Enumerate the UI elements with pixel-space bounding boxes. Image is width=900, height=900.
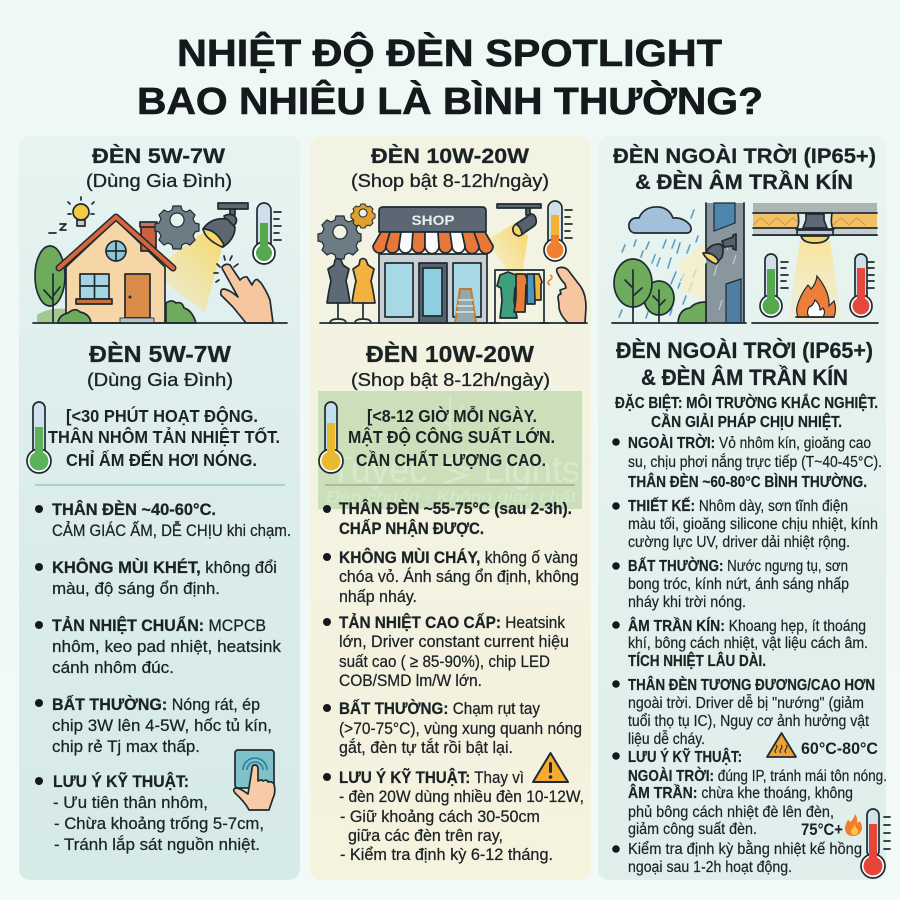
title: BAO NHIÊU LÀ BÌNH THƯỜNG? — [137, 79, 763, 123]
heading: 5W-7W lower — [87, 340, 233, 390]
bullet: technical notes: giảm công suất đèn. — [628, 821, 757, 838]
bullet: infrared check: Kiểm tra định kỳ bằng nhiệt kế hồng — [628, 841, 862, 858]
heading: 10W-20W lower: (Shop bật 8-12h/ngày) — [351, 370, 550, 390]
panel: 5W-7W household lamps — [19, 136, 300, 880]
heading: outdoor top: & ĐÈN ÂM TRẦN KÍN — [635, 170, 853, 194]
bullet: abnormal signs: chip rẻ Tj max thấp. — [52, 737, 200, 756]
bullet: body temperature: tuổi thọ tụ IC), Nguy cơ ảnh hưởng vật — [628, 713, 870, 730]
bullet: no burnt smell — [35, 558, 277, 598]
bullet: technical notes: - Giữ khoảng cách 30-50cm — [340, 808, 540, 826]
summary text: under 30 minutes: CHỈ ẤM ĐẾN HƠI NÓNG. — [66, 449, 257, 470]
watermark — [318, 391, 582, 509]
bullet: outdoor: THÂN ĐÈN ~60-80°C BÌNH THƯỜNG. — [628, 473, 867, 491]
bullet: recessed ceiling: khí, bông cách nhiệt, vật liệu cách âm. — [628, 635, 868, 652]
bullet: recessed ceiling: TÍCH NHIỆT LÂU DÀI. — [628, 652, 766, 670]
bullet: infrared check — [612, 841, 862, 876]
summary text: under 30 minutes: [<30 PHÚT HOẠT ĐỘNG. — [66, 405, 258, 426]
panel: outdoor IP65 and sealed recessed lamps — [598, 136, 890, 880]
summary text: 8-12 hours — [348, 405, 555, 470]
summary text: under 30 minutes: THÂN NHÔM TẢN NHIỆT TỐT. — [48, 426, 280, 447]
summary text: 8-12 hours: [<8-12 GIỜ MỖI NGÀY. — [367, 405, 537, 426]
bullet: technical notes: LƯU Ý KỸ THUẬT: — [53, 771, 189, 791]
heading: 10W-20W lower: ĐÈN 10W-20W — [366, 340, 534, 367]
bullet: design: màu tối, gioăng silicone chịu nhiệt, kính — [628, 516, 878, 533]
illustration: shop with spotlight: SHOP — [412, 212, 454, 228]
bullet: abnormal signs — [612, 557, 849, 611]
heading: outdoor top — [613, 144, 876, 194]
bullet: outdoor: NGOÀI TRỜI: Vỏ nhôm kín, gioăng cao — [628, 434, 871, 452]
bullet: body temperature: CHẤP NHẬN ĐƯỢC. — [339, 519, 484, 538]
bullet: premium cooling: COB/SMD lm/W lớn. — [339, 672, 482, 690]
heading: 5W-7W top — [86, 145, 232, 191]
bullet: no burning smell: nhấp nháy. — [339, 588, 417, 606]
heading: 10W-20W top: ĐÈN 10W-20W — [371, 145, 529, 168]
special note text: CẦN GIẢI PHÁP CHỊU NHIỆT. — [651, 413, 842, 431]
bullet: abnormal signs: BẤT THƯỜNG: Nước ngưng tụ, sơn — [628, 557, 848, 575]
bullet: design — [612, 498, 878, 551]
title — [137, 30, 763, 123]
callout: 75°C+ with flame and red thermometer: 75°C+ — [801, 820, 843, 839]
bullet: design: cường lực UV, driver dải nhiệt rộng. — [628, 534, 850, 551]
bullet: technical notes: ÂM TRẦN: chừa khe thoáng, không — [628, 784, 853, 802]
heading: outdoor top: ĐÈN NGOÀI TRỜI (IP65+) — [613, 144, 876, 168]
heading: 5W-7W top: ĐÈN 5W-7W — [92, 145, 225, 168]
illustration: outdoor lamp in rain — [612, 203, 746, 323]
bullet: premium cooling: suất cao ( ≥ 85-90%), chip LED — [339, 653, 550, 671]
bullet: outdoor — [612, 434, 882, 491]
special note text — [615, 394, 878, 431]
icon: green thermometer — [27, 402, 51, 473]
bullet: technical notes: - Ưu tiên thân nhôm, — [53, 793, 208, 812]
icon: warning triangle — [533, 753, 568, 782]
heading: 5W-7W lower: (Dùng Gia Đình) — [87, 370, 233, 390]
bullet: technical notes — [323, 767, 584, 864]
heading: 10W-20W top — [351, 145, 549, 191]
bullet: abnormal signs — [323, 699, 582, 757]
heading: outdoor lower: & ĐÈN ÂM TRẦN KÍN — [641, 365, 848, 390]
illustration: recessed ceiling lamp — [752, 203, 878, 323]
bullet: body temperature — [612, 676, 875, 748]
watermark: Đèn chuẩn - Không gian chất — [326, 488, 577, 506]
bullet: premium cooling: lớn, Driver constant current hiệu — [339, 633, 569, 651]
summary text: 8-12 hours: MẬT ĐỘ CÔNG SUẤT LỚN. — [348, 426, 555, 447]
bullet: body temperature: THÂN ĐÈN ~55-75°C (sau 2-3h). — [339, 499, 572, 518]
bullet: no burning smell — [323, 548, 579, 606]
bullet: recessed ceiling: ÂM TRẦN KÍN: Khoang hẹp, ít thoáng — [628, 617, 866, 635]
bullet: infrared check: ngoại sau 1-2h hoạt động. — [628, 859, 792, 876]
bullet: technical notes: - đèn 20W dùng nhiều đèn 10-12W, — [339, 788, 584, 806]
bullet: abnormal signs: BẤT THƯỜNG: Chạm rụt tay — [339, 699, 541, 718]
illustration: shop with spotlight — [318, 201, 587, 323]
heading: 5W-7W lower: ĐÈN 5W-7W — [89, 340, 231, 367]
bullet: body temperature — [35, 500, 291, 540]
bullet: standard cooling: cánh nhôm đúc. — [52, 658, 174, 677]
panel: 10W-20W shop lamps — [310, 136, 591, 880]
bullet: technical notes: LƯU Ý KỸ THUẬT: Thay vì — [339, 767, 524, 787]
bullet: body temperature: liệu dễ cháy. — [628, 731, 705, 748]
bullet: body temperature: ngoài trời. Driver dễ bị "nướng" (giảm — [628, 695, 864, 712]
bullet: technical notes: - Chừa khoảng trống 5-7cm, — [54, 814, 264, 833]
bullet: abnormal signs — [35, 695, 272, 756]
summary text: 8-12 hours: CẦN CHẤT LƯỢNG CAO. — [356, 449, 546, 470]
bullet: abnormal signs: chip 3W lên 4-5W, hốc tủ kín, — [52, 716, 272, 735]
bullet: abnormal signs: (>70-75°C), vùng xung quanh nóng — [339, 720, 582, 738]
heading: 10W-20W top: (Shop bật 8-12h/ngày) — [351, 171, 549, 191]
bullet: abnormal signs: nháy khi trời nóng. — [628, 594, 746, 611]
bullet: recessed ceiling — [612, 617, 868, 670]
callout: 75°C+ with flame and red thermometer — [801, 809, 890, 878]
bullet: technical notes: phủ bông cách nhiệt đè lên đèn, — [628, 804, 834, 821]
bullet: technical notes: LƯU Ý KỸ THUẬT: — [628, 748, 742, 766]
heading: 10W-20W lower — [351, 340, 550, 390]
bullet: no burning smell: chóa vỏ. Ánh sáng ổn định, không — [339, 567, 579, 586]
bullet: technical notes: - Tránh lắp sát nguồn nhiệt. — [54, 835, 260, 854]
title: NHIỆT ĐỘ ĐÈN SPOTLIGHT — [177, 30, 722, 75]
bullet: body temperature: THÂN ĐÈN ~40-60°C. — [52, 500, 216, 519]
callout: hot surface 60-80°C: 60°C-80°C — [801, 739, 878, 758]
bullet: technical notes: - Kiểm tra định kỳ 6-12 tháng. — [340, 846, 553, 864]
icon: hand touching panel — [234, 750, 275, 810]
bullet: standard cooling: nhôm, keo pad nhiệt, heatsink — [52, 637, 281, 656]
bullet: premium cooling — [323, 613, 569, 690]
bullet: technical notes — [612, 748, 887, 838]
summary text: under 30 minutes — [48, 405, 280, 470]
bullet: standard cooling — [35, 616, 281, 677]
bullet: no burnt smell: màu, độ sáng ổn định. — [52, 579, 220, 598]
heading: outdoor lower: ĐÈN NGOÀI TRỜI (IP65+) — [616, 338, 873, 363]
bullet: technical notes: giữa các đèn trên ray, — [348, 827, 503, 845]
callout: hot surface 60-80°C — [767, 733, 878, 758]
bullet: abnormal signs: bong tróc, kính nứt, ánh sáng nhấp — [628, 576, 849, 593]
bullet: technical notes — [35, 771, 264, 854]
bullet: design: THIẾT KẾ: Nhôm dày, sơn tĩnh điện — [628, 498, 848, 515]
illustration: house with spotlight — [33, 197, 287, 323]
bullet: no burning smell: KHÔNG MÙI CHÁY, không ố vàng — [339, 548, 578, 567]
bullet: no burnt smell: KHÔNG MÙI KHÉT, không đổi — [52, 558, 277, 577]
watermark: Tuyec ≶ Lights — [330, 449, 580, 490]
bullet: abnormal signs: BẤT THƯỜNG: Nóng rát, ép — [52, 695, 260, 714]
icon: yellow thermometer — [319, 402, 343, 473]
bullet: body temperature — [323, 499, 572, 538]
bullet: body temperature: CẢM GIÁC ẤM, DỄ CHỊU khi chạm. — [52, 521, 291, 540]
bullet: abnormal signs: gắt, đèn tự tắt rồi bật lại. — [339, 738, 513, 757]
bullet: standard cooling: TẢN NHIỆT CHUẨN: MCPCB — [52, 616, 266, 635]
heading: 5W-7W top: (Dùng Gia Đình) — [86, 171, 232, 191]
bullet: premium cooling: TẢN NHIỆT CAO CẤP: Heatsink — [339, 613, 566, 632]
heading: outdoor lower — [616, 338, 873, 390]
